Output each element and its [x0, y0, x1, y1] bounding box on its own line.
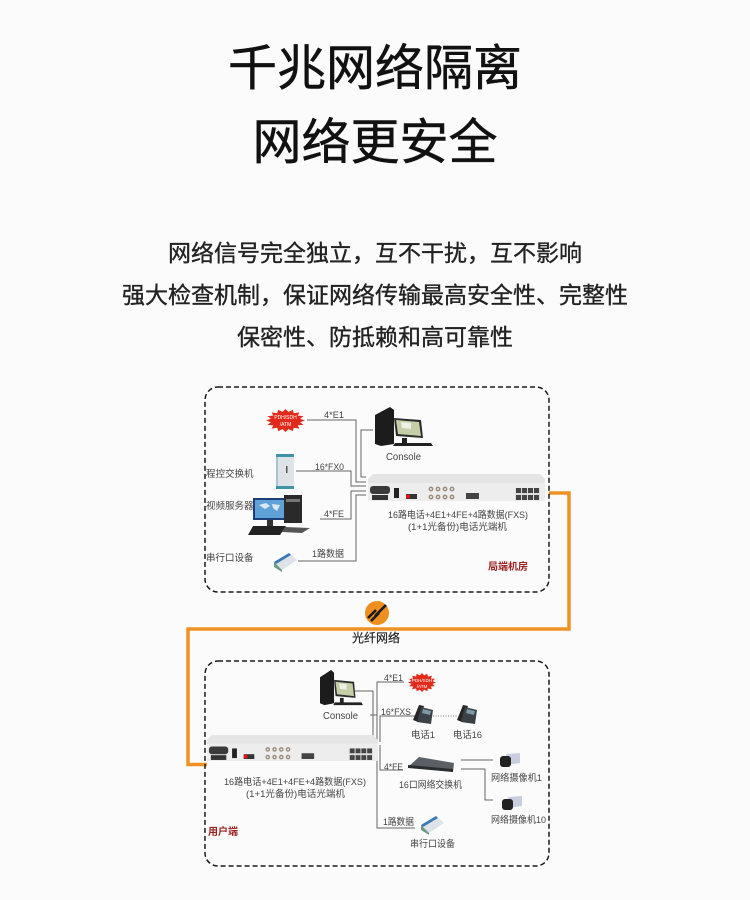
label: 16*FX0: 16*FX0	[315, 462, 344, 473]
label: 16口网络交换机: 16口网络交换机	[399, 779, 462, 791]
caption: user terminal: 16路电话+4E1+4FE+4路数据(FXS)	[224, 776, 366, 788]
text block: description: 保密性、防抵赖和高可靠性	[237, 318, 513, 352]
label: 网络摄像机10: 网络摄像机10	[491, 814, 546, 826]
icon: PDH/SDH/ATM burst: /ATM	[280, 422, 291, 428]
dotted line between phones	[433, 715, 458, 717]
caption: central terminal: (1+1光备份)电话光端机	[408, 521, 507, 533]
label: 网络摄像机1: 网络摄像机1	[491, 772, 542, 784]
icon: console computer	[375, 407, 433, 446]
label: Console: Console	[386, 451, 421, 463]
text block: description: 网络信号完全独立，互不干扰，互不影响	[168, 234, 582, 268]
title: 千兆网络隔离	[228, 29, 522, 100]
label: 用户端: 用户端	[208, 825, 238, 838]
icon: serial device	[421, 816, 444, 835]
icon: phone 16	[457, 705, 477, 724]
label: 电话16: 电话16	[453, 729, 482, 741]
label: 4*FE: 4*FE	[384, 762, 403, 773]
label: 串行口设备: 串行口设备	[410, 838, 455, 850]
panel: central office	[205, 387, 549, 592]
label: 程控交换机: 程控交换机	[206, 468, 254, 480]
title	[228, 29, 522, 174]
device: central optical terminal	[368, 474, 545, 501]
fiber link: orange line	[188, 493, 569, 764]
device: user optical terminal	[207, 735, 378, 761]
text block: description	[122, 234, 628, 352]
icon: PDH/SDH/ATM burst	[408, 673, 436, 692]
label: 1路数据: 1路数据	[383, 816, 414, 828]
icon: camera 10	[502, 796, 522, 810]
label: 电话1: 电话1	[411, 729, 435, 741]
icon: console computer	[320, 670, 363, 705]
label: 4*FE: 4*FE	[324, 509, 344, 520]
icon: exchange cabinet	[276, 454, 294, 489]
icon: PDH/SDH/ATM burst: PDH/SDH	[274, 415, 297, 421]
icon: phone 1	[413, 705, 433, 724]
label: 16*FXS: 16*FXS	[381, 707, 411, 718]
icon: camera 1	[500, 753, 520, 767]
label: 1路数据: 1路数据	[312, 548, 344, 560]
caption: central terminal	[388, 509, 528, 533]
icon: PDH/SDH/ATM burst: /ATM	[417, 684, 427, 689]
icon: serial device	[274, 553, 297, 572]
icon: video server computer	[248, 495, 310, 535]
label: 视频服务器: 视频服务器	[206, 500, 254, 512]
icon: PDH/SDH/ATM burst: PDH/SDH	[412, 678, 432, 683]
icon: network switch	[408, 757, 454, 772]
label: 4*E1: 4*E1	[384, 673, 403, 684]
label: 局端机房: 局端机房	[488, 560, 528, 573]
icon: fiber network badge	[365, 601, 389, 625]
title: 网络更安全	[252, 103, 498, 174]
caption: central terminal: 16路电话+4E1+4FE+4路数据(FXS)	[388, 509, 528, 521]
label: 4*E1: 4*E1	[324, 410, 344, 421]
caption: user terminal	[224, 776, 366, 800]
text block: description: 强大检查机制，保证网络传输最高安全性、完整性	[122, 276, 628, 310]
wiring: central office	[296, 420, 373, 561]
label: 光纤网络: 光纤网络	[352, 630, 400, 645]
label: Console: Console	[323, 710, 358, 722]
label: 串行口设备: 串行口设备	[206, 552, 254, 564]
icon: PDH/SDH/ATM burst	[266, 409, 305, 432]
panel: user side	[205, 661, 549, 866]
caption: user terminal: (1+1光备份)电话光端机	[246, 788, 345, 800]
wiring: user side	[355, 682, 493, 828]
